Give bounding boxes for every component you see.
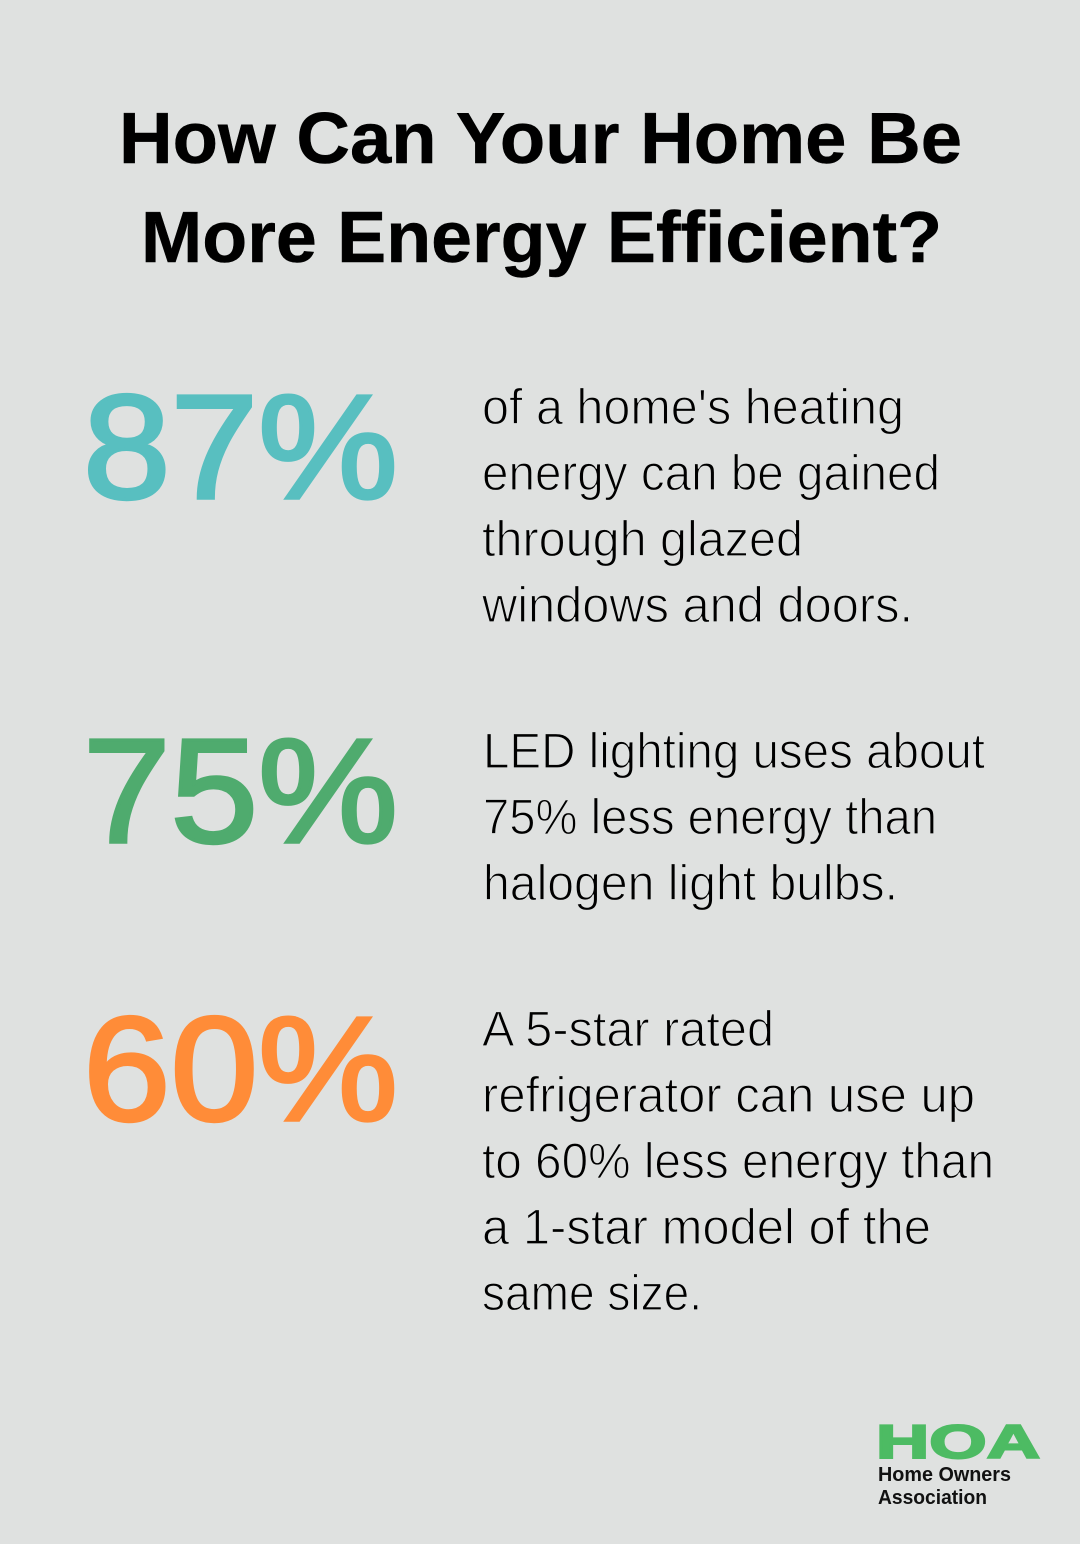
- stat: 60%: 60%: [83, 987, 398, 1152]
- title: More Energy Efficient?: [141, 198, 942, 278]
- stat: 75%: 75%: [83, 709, 398, 874]
- text block: refrigerator: [482, 1001, 994, 1321]
- text block: windows and doors: of a home's heating: [482, 379, 904, 435]
- logo name: [878, 1464, 1011, 1509]
- text block: windows and doors: windows and doors.: [481, 577, 913, 633]
- text block: windows and doors: energy can be gained: [482, 445, 940, 501]
- text block: refrigerator: same size.: [482, 1265, 702, 1321]
- panel: LED lighting statistic: [83, 709, 985, 911]
- text block: windows and doors: [481, 379, 940, 633]
- text block: refrigerator: to 60% less energy than: [482, 1133, 994, 1189]
- text block: refrigerator: a 1-star model of the: [482, 1199, 931, 1255]
- text block: refrigerator: A 5-star rated: [482, 1001, 774, 1057]
- logo name: Association: [878, 1487, 987, 1509]
- title: How Can Your Home Be: [119, 99, 962, 179]
- text block: LED lighting: [483, 723, 985, 911]
- logo letters: HOA: HOA: [876, 1415, 1040, 1468]
- text block: windows and doors: through glazed: [482, 511, 803, 567]
- panel: windows and doors statistic: [83, 365, 940, 633]
- text block: LED lighting: halogen light bulbs.: [483, 855, 898, 911]
- text block: LED lighting: LED lighting uses about: [483, 723, 985, 779]
- text block: refrigerator: refrigerator can use up: [482, 1067, 975, 1123]
- logo: Home Owners Association: [876, 1415, 1040, 1509]
- text block: LED lighting: 75% less energy than: [483, 789, 937, 845]
- logo name: Home Owners: [878, 1464, 1011, 1486]
- panel: refrigerator statistic: [83, 987, 994, 1321]
- stat: 87%: 87%: [83, 365, 398, 530]
- title: [119, 99, 962, 278]
